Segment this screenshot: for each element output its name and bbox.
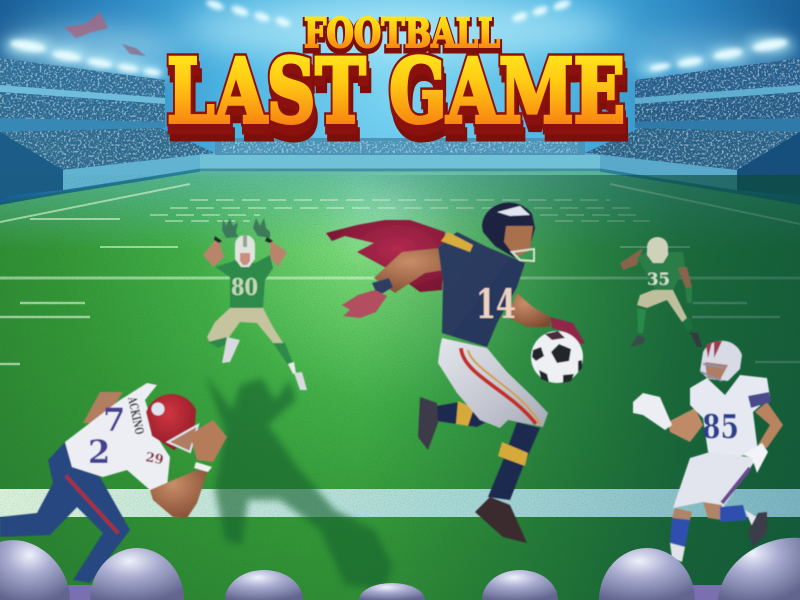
back leg (430, 402, 490, 427)
player: green 35 right (620, 237, 702, 347)
field right side shading (0, 175, 800, 489)
title: FOOTBALL: FOOTBALL (304, 10, 500, 57)
player: number 72 crouching left: 72 (88, 401, 125, 471)
right arm (507, 293, 550, 327)
helmet (482, 203, 535, 258)
title: LAST GAME: LAST GAME (168, 47, 626, 151)
player: number 72 crouching left (0, 383, 227, 583)
player: number 72 crouching left: ACKINO (125, 395, 147, 436)
title: LAST GAME: LAST GAME (170, 54, 628, 158)
right stands (583, 58, 800, 196)
front leg (488, 422, 540, 500)
flags (64, 12, 146, 56)
player: number 72 crouching left: 29 (144, 450, 165, 468)
title (167, 10, 628, 158)
sky glow (0, 0, 800, 73)
field curb (0, 170, 800, 203)
stadium lights glow (4, 37, 794, 77)
player: green 35 right: 35 (647, 270, 670, 290)
title: LAST GAME: LAST GAME (167, 39, 625, 143)
player: main runner number 14 (326, 203, 585, 543)
player shadow (205, 375, 392, 590)
field horizon tint (0, 172, 800, 250)
goal line stripe (0, 489, 800, 517)
player: number 85 right (633, 341, 783, 562)
title: FOOTBALL: FOOTBALL (304, 13, 500, 60)
left arm (374, 248, 463, 293)
pants (438, 338, 548, 428)
torso (438, 232, 525, 347)
player: green 80 left: 80 (231, 274, 258, 301)
football field (0, 172, 800, 600)
foreground grass shading (0, 517, 800, 600)
left stands (0, 58, 217, 196)
field lines (0, 184, 800, 364)
stadium lights (9, 0, 789, 77)
stadium sky (0, 0, 800, 205)
title: LAST GAME: LAST GAME (167, 39, 625, 143)
foreground helmets (0, 538, 800, 600)
player: number 85 right: 85 (702, 407, 739, 446)
crowd texture (0, 58, 800, 170)
ball (531, 331, 583, 383)
player: main runner number 14: 14 (476, 281, 516, 328)
field grain texture (0, 175, 800, 600)
player: green 80 left (203, 218, 307, 390)
center stands (200, 138, 600, 173)
cape (326, 220, 445, 292)
title: LAST GAME (167, 39, 628, 158)
